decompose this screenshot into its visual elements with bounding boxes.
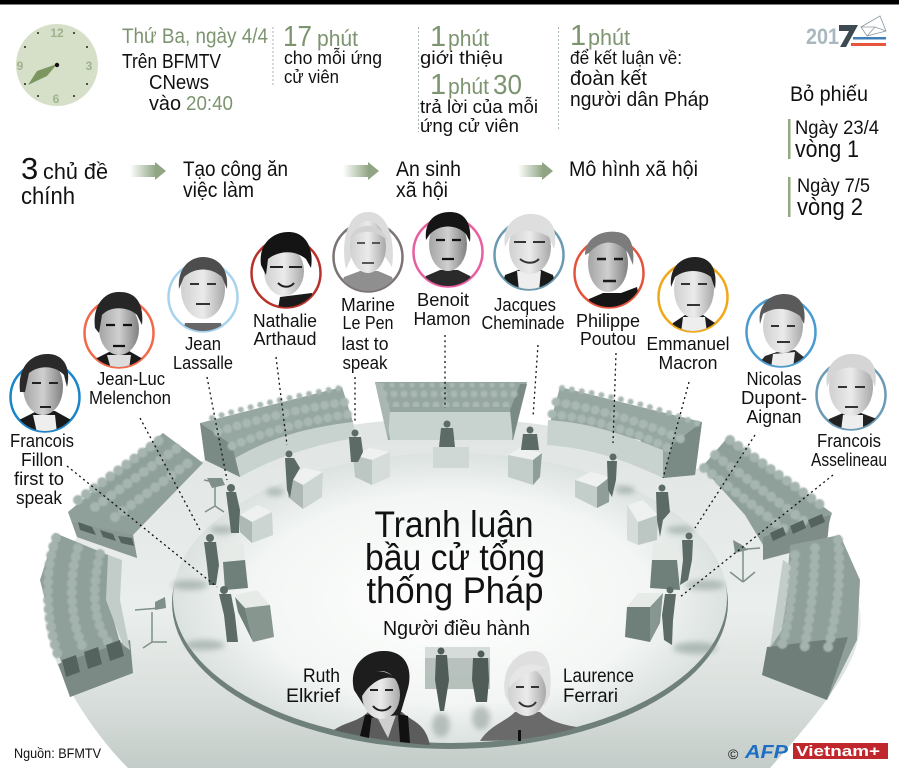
candidate: Jacques Cheminade bbox=[494, 214, 564, 291]
candidate: Nicolas Dupont-Aignan bbox=[746, 294, 816, 368]
icon: clock bbox=[16, 24, 98, 106]
candidate names: Lassalle bbox=[173, 353, 233, 373]
candidate names: Nathalie bbox=[253, 311, 317, 331]
voting dates: Bỏ phiếu bbox=[790, 83, 868, 106]
timing: conclusion: 1 bbox=[570, 20, 586, 52]
heading: 3 main topics bbox=[21, 151, 108, 210]
candidate: Benoit Hamon bbox=[414, 212, 482, 288]
topic 1 text bbox=[183, 158, 288, 202]
candidate names: Jacques bbox=[494, 295, 556, 315]
candidate: Francois Fillon bbox=[10, 354, 80, 433]
timing: conclusion: để kết luận về: bbox=[570, 48, 682, 68]
figure shadows bbox=[172, 486, 725, 654]
candidate names: first to bbox=[14, 469, 64, 489]
timing: introduction and answers: ứng cử viên bbox=[420, 116, 519, 136]
moderator name: Laurence Ferrari: Ferrari bbox=[563, 686, 618, 707]
schedule: date and channels bbox=[122, 25, 268, 115]
candidate names: Fillon bbox=[21, 450, 63, 470]
icon: clock: 6 bbox=[53, 92, 60, 106]
voting dates: vòng 1 bbox=[795, 136, 859, 163]
icon: clock: 12 bbox=[50, 26, 64, 40]
topic 2 text bbox=[396, 158, 461, 202]
studio floor bbox=[44, 418, 861, 768]
timing: 17 minutes: phút bbox=[317, 26, 358, 51]
cameras bbox=[135, 478, 760, 648]
seating block: right bbox=[702, 437, 832, 560]
voting dates: Ngày 7/5 bbox=[797, 176, 870, 197]
seating block: far right bbox=[762, 535, 860, 700]
candidate names bbox=[10, 290, 887, 508]
moderator name: Laurence Ferrari bbox=[563, 666, 634, 707]
top black bar bbox=[0, 0, 899, 4]
candidate: Nathalie Arthaud bbox=[252, 232, 320, 309]
candidate: Philippe Poutou bbox=[574, 232, 644, 309]
topic 1 text: việc làm bbox=[183, 179, 254, 202]
timing: introduction and answers: 1 bbox=[430, 69, 446, 101]
candidate names: Dupont- bbox=[741, 388, 807, 408]
heading: 3 main topics: chính bbox=[21, 183, 75, 210]
timing: 17 minutes: cử viên bbox=[284, 67, 339, 87]
candidate names: Arthaud bbox=[254, 329, 316, 349]
logo: AFP Vietnam+: AFP bbox=[744, 742, 789, 762]
candidate names: speak bbox=[16, 488, 63, 508]
portrait: Ruth Elkrief bbox=[334, 651, 430, 745]
timing: introduction and answers: 30 bbox=[493, 69, 522, 100]
candidate names: Francois bbox=[10, 431, 74, 451]
timing: introduction and answers: giới thiệu bbox=[420, 48, 503, 68]
title: bầu cử tổng bbox=[365, 537, 545, 578]
timing: conclusion: phút bbox=[588, 25, 630, 50]
candidate: Marine Le Pen bbox=[334, 212, 402, 293]
title: thống Pháp bbox=[366, 570, 544, 611]
seating block: back left bbox=[200, 387, 356, 477]
candidate names: Marine bbox=[341, 295, 395, 315]
timing: conclusion: người dân Pháp bbox=[570, 89, 709, 111]
timing: conclusion: đoàn kết bbox=[570, 68, 647, 90]
candidate names: Asselineau bbox=[811, 450, 887, 470]
moderator desk and figures bbox=[425, 647, 490, 737]
candidate names: Aignan bbox=[746, 407, 802, 427]
candidate names: Macron bbox=[658, 353, 718, 373]
icon: clock: 3 bbox=[86, 59, 93, 73]
topic 2 text: xã hội bbox=[396, 179, 448, 202]
moderator name: Ruth Elkrief: Ruth bbox=[303, 666, 340, 687]
voting dates: Ngày 23/4 bbox=[795, 118, 879, 139]
candidate names: Benoit bbox=[417, 290, 469, 310]
portrait: Laurence Ferrari bbox=[480, 651, 577, 741]
timing: introduction and answers bbox=[420, 21, 538, 136]
logo: AFP Vietnam+: © bbox=[728, 746, 739, 762]
icon: 2017 election logo bbox=[806, 16, 886, 49]
candidate names: Poutou bbox=[580, 329, 636, 349]
schedule: date and channels: vào bbox=[149, 93, 181, 115]
voting dates bbox=[788, 83, 879, 221]
voting dates: vòng 2 bbox=[797, 194, 863, 221]
timing: 17 minutes: 17 bbox=[283, 21, 312, 53]
moderator name: Laurence Ferrari: Laurence bbox=[563, 666, 634, 687]
candidate names: Hamon bbox=[414, 309, 470, 329]
title bbox=[365, 504, 545, 611]
topic 1 text: Tạo công ăn bbox=[183, 158, 288, 181]
dotted leader lines bbox=[67, 335, 833, 597]
candidate names: Jean bbox=[185, 334, 221, 354]
candidate names: Nicolas bbox=[746, 369, 802, 389]
schedule: date and channels: 20:40 bbox=[186, 93, 233, 115]
timing: conclusion bbox=[570, 20, 709, 111]
moderators label: Người điều hành bbox=[383, 618, 530, 640]
topic 2 text: An sinh bbox=[396, 158, 461, 181]
heading: 3 main topics: chủ đề bbox=[43, 159, 108, 184]
debate stage bbox=[172, 453, 728, 749]
schedule: date and channels: Trên BFMTV bbox=[122, 51, 222, 73]
dashed dividers bbox=[273, 27, 558, 132]
seating block: left bbox=[68, 433, 203, 558]
candidate figures bbox=[204, 420, 693, 645]
seating block: far left bbox=[40, 533, 133, 697]
arrow: topic 2 bbox=[343, 162, 379, 180]
timing: introduction and answers: phút bbox=[448, 26, 489, 51]
candidate: Emmanuel Macron bbox=[658, 257, 728, 333]
candidate names: Jean-Luc bbox=[97, 369, 165, 389]
schedule: date and channels: CNews bbox=[149, 72, 209, 94]
arrow: topic 3 bbox=[518, 162, 553, 180]
logo: AFP Vietnam+: Vietnam+ bbox=[796, 743, 880, 760]
timing: 17 minutes bbox=[283, 21, 382, 87]
schedule: date and channels: Thứ Ba, ngày 4/4 bbox=[122, 25, 268, 48]
candidate names: speak bbox=[342, 353, 388, 373]
timing: introduction and answers: trả lời của mỗi bbox=[420, 96, 538, 117]
seating block: back centre bbox=[375, 382, 527, 440]
timing: 17 minutes: cho mỗi ứng bbox=[284, 47, 382, 68]
timing: introduction and answers: 1 bbox=[430, 21, 446, 53]
candidate names: Melenchon bbox=[89, 388, 171, 408]
seating block: back right bbox=[547, 387, 702, 478]
arrow: topic 1 bbox=[130, 162, 166, 180]
moderator name: Ruth Elkrief bbox=[286, 666, 341, 707]
candidate: Francois Asselineau bbox=[816, 354, 886, 431]
moderator name: Ruth Elkrief: Elkrief bbox=[286, 686, 341, 707]
candidate: Jean-Luc Melenchon bbox=[84, 292, 154, 369]
desks bbox=[223, 447, 680, 642]
timing: introduction and answers: phút bbox=[448, 74, 489, 99]
candidate names: Francois bbox=[817, 431, 881, 451]
candidate names: Emmanuel bbox=[646, 334, 730, 354]
heading: 3 main topics: 3 bbox=[21, 151, 38, 186]
title: Tranh luận bbox=[374, 504, 534, 545]
icon: clock: 9 bbox=[17, 59, 24, 73]
candidate names: Philippe bbox=[576, 311, 640, 331]
candidate names: Le Pen bbox=[342, 313, 394, 333]
candidate: Jean Lassalle bbox=[168, 257, 238, 333]
logo: AFP Vietnam+ bbox=[728, 742, 888, 762]
candidate names: last to bbox=[342, 334, 388, 354]
icon: 2017 election logo: 201 bbox=[806, 24, 839, 49]
source: Nguồn: BFMTV bbox=[14, 745, 102, 761]
topic 3 text: Mô hình xã hội bbox=[569, 158, 698, 181]
candidate names: Cheminade bbox=[482, 313, 564, 333]
